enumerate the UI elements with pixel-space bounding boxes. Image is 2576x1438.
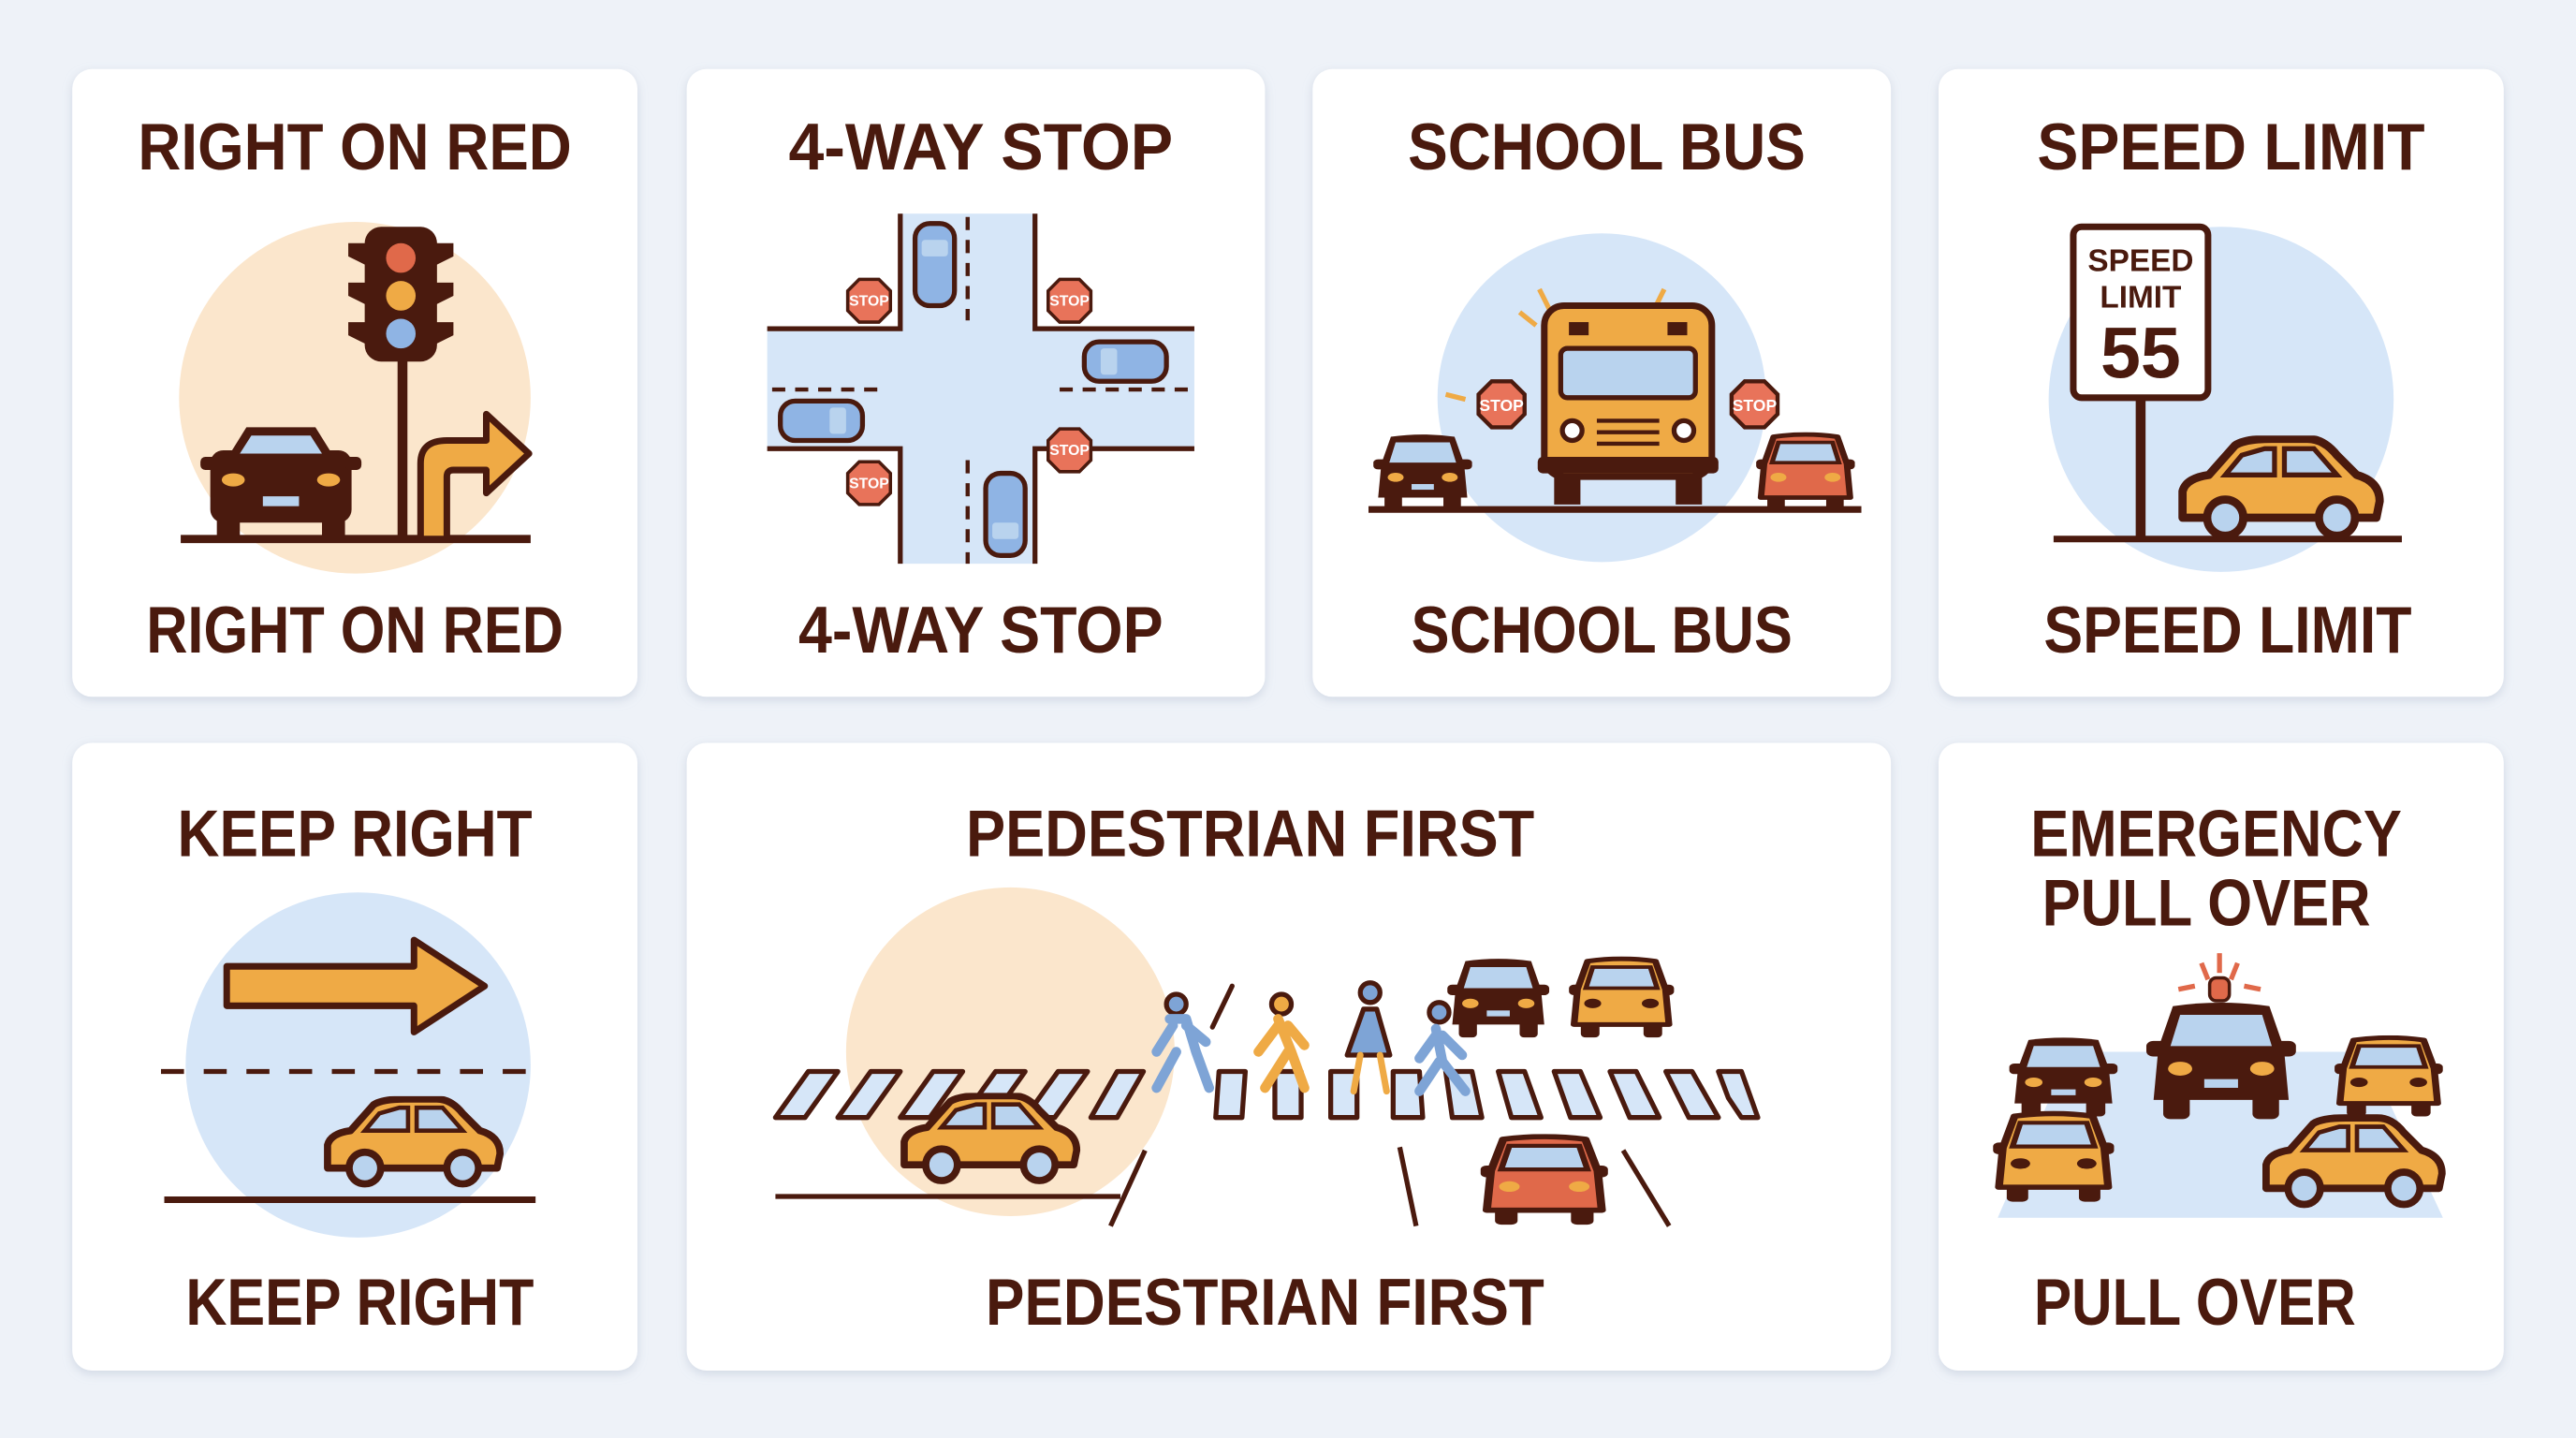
illustration: intersection: STOP xyxy=(849,476,889,492)
heading: right on red: RIGHT ON RED xyxy=(138,110,572,183)
illustration: emergency vehicle with cars pulling over xyxy=(1993,953,2443,1218)
caption: 4-way stop: 4-WAY STOP xyxy=(798,593,1164,667)
caption: pedestrian first: PEDESTRIAN FIRST xyxy=(986,1265,1544,1339)
illustration: speed limit sign and car xyxy=(2049,227,2402,572)
caption: keep right: KEEP RIGHT xyxy=(185,1265,534,1339)
card: 4-way stop xyxy=(687,69,1265,697)
card: pedestrian first xyxy=(687,742,1891,1371)
illustration: school bus with stop arms: STOP xyxy=(1733,396,1777,415)
heading: emergency pull over: PULL OVER xyxy=(2042,865,2371,939)
caption: right on red: RIGHT ON RED xyxy=(146,593,564,667)
heading: emergency pull over xyxy=(2030,797,2402,939)
illustration: traffic light and car xyxy=(179,222,531,574)
caption: school bus: SCHOOL BUS xyxy=(1412,593,1793,667)
card: emergency pull over xyxy=(1939,742,2504,1371)
illustration: school bus with stop arms xyxy=(1368,233,1862,562)
illustration: intersection xyxy=(768,213,1194,564)
heading: keep right: KEEP RIGHT xyxy=(178,797,533,871)
heading: 4-way stop: 4-WAY STOP xyxy=(788,110,1173,183)
illustration: school bus with stop arms: STOP xyxy=(1479,396,1524,415)
heading: pedestrian first: PEDESTRIAN FIRST xyxy=(966,797,1534,871)
card: right on red xyxy=(72,69,637,697)
illustration: intersection: STOP xyxy=(849,294,889,310)
illustration: speed limit sign and car: LIMIT xyxy=(2100,280,2182,315)
card: keep right xyxy=(72,742,637,1371)
heading: school bus: SCHOOL BUS xyxy=(1408,110,1806,183)
card: speed limit xyxy=(1939,69,2504,697)
illustration: intersection: STOP xyxy=(1049,294,1090,310)
illustration: speed limit sign and car: SPEED xyxy=(2087,244,2193,279)
illustration: speed limit sign and car: 55 xyxy=(2100,314,2181,394)
heading: speed limit: SPEED LIMIT xyxy=(2037,110,2425,183)
illustration: arrow and car on right lane xyxy=(161,892,539,1238)
heading: emergency pull over: EMERGENCY xyxy=(2030,797,2402,871)
illustration: intersection: STOP xyxy=(1049,443,1090,459)
card: school bus xyxy=(1312,69,1891,697)
illustration: crosswalk with pedestrians and cars xyxy=(775,888,1758,1226)
caption: speed limit: SPEED LIMIT xyxy=(2043,593,2412,667)
caption: pull over: PULL OVER xyxy=(2034,1265,2356,1339)
